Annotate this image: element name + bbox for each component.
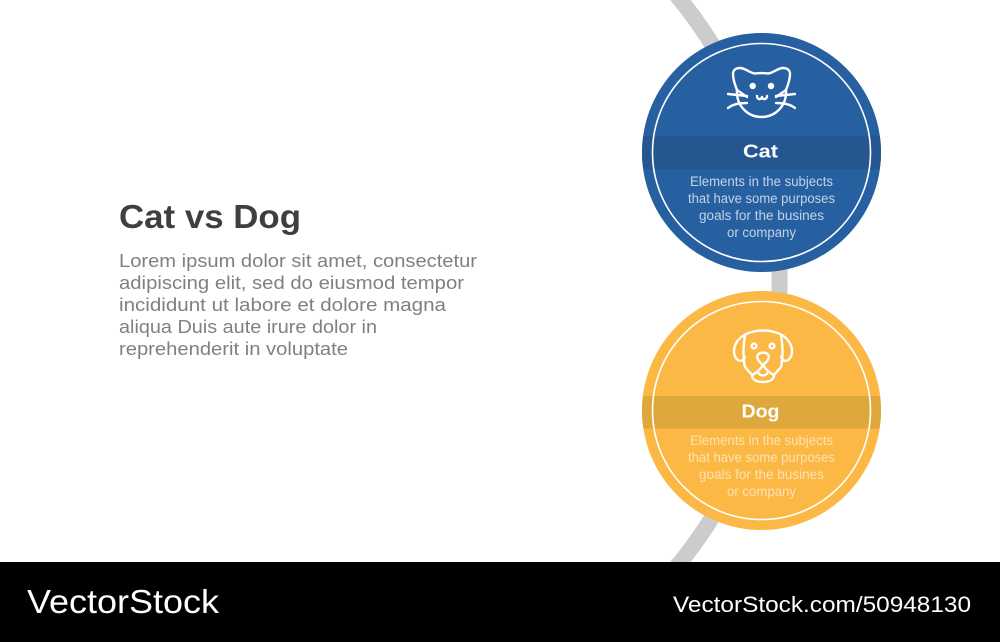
cat heading: Cat xyxy=(743,140,778,162)
description text block: Lorem ipsum dolor sit amet, consectetur xyxy=(119,250,477,271)
footer image id: VectorStock.com/50948130 xyxy=(673,592,971,617)
cat description: or company xyxy=(727,225,796,240)
footer brand: VectorStock xyxy=(27,583,220,620)
description text block: adipiscing elit, sed do eiusmod tempor xyxy=(119,272,464,293)
description text block: incididunt ut labore et dolore magna xyxy=(119,294,447,315)
dog inner ring xyxy=(652,302,870,520)
cat description: Elements in the subjects xyxy=(690,174,833,189)
connecting arc xyxy=(667,0,780,578)
cat circle xyxy=(642,33,881,272)
description text block xyxy=(119,250,477,359)
dog description: goals for the busines xyxy=(699,467,824,482)
icon: cat face xyxy=(728,68,795,117)
dog circle xyxy=(642,291,881,530)
icon: dog face xyxy=(734,330,792,382)
dog label band xyxy=(642,396,882,428)
cat description xyxy=(688,174,835,240)
panel: cat xyxy=(642,33,882,272)
description text block: aliqua Duis aute irure dolor in xyxy=(119,316,377,337)
dog description: or company xyxy=(727,484,796,499)
dog description xyxy=(688,433,835,499)
dog description: that have some purposes xyxy=(688,450,835,465)
dog description: Elements in the subjects xyxy=(690,433,833,448)
cat inner ring xyxy=(652,44,870,262)
cat description: goals for the busines xyxy=(699,208,824,223)
footer bar xyxy=(0,562,1000,642)
description text block: reprehenderit in voluptate xyxy=(119,338,348,359)
cat label band xyxy=(642,136,882,169)
panel: dog xyxy=(642,291,882,530)
title: Cat vs Dog xyxy=(119,198,301,235)
cat description: that have some purposes xyxy=(688,191,835,206)
dog heading: Dog xyxy=(742,400,780,422)
